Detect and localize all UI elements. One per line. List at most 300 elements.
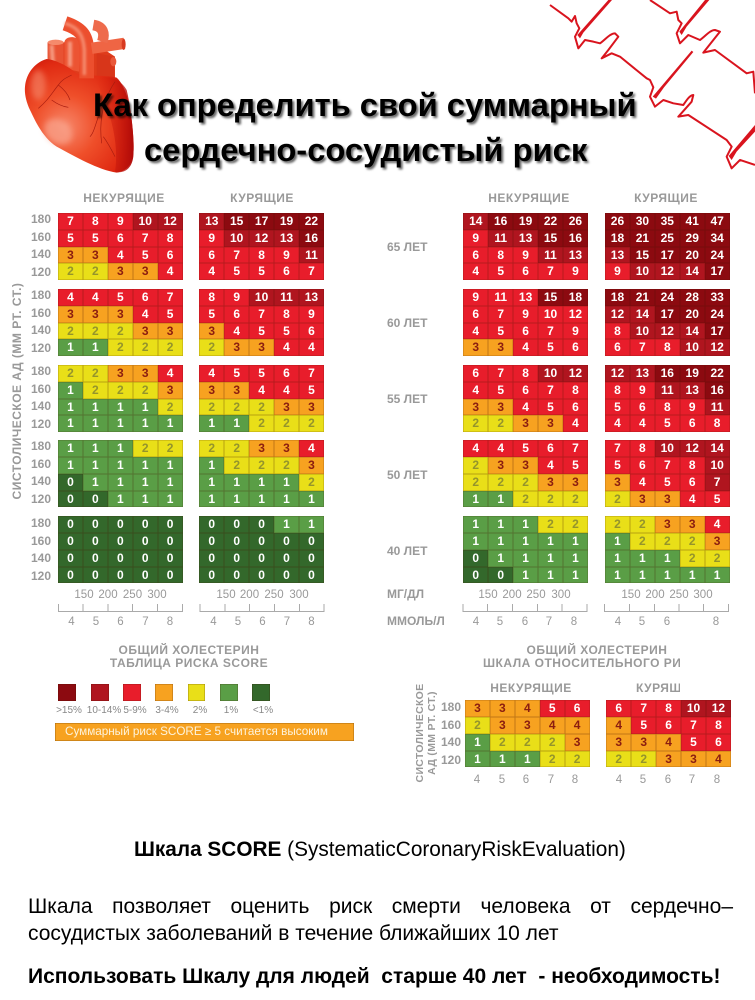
legend heading: [110, 643, 268, 670]
panel: left smokers 55: [199, 365, 324, 432]
panel: left smokers 60: 5: [258, 324, 265, 338]
cholesterol axes: 6: [522, 616, 528, 628]
panel: right smokers 40: 1: [664, 551, 671, 565]
row labels 55: 120: [31, 416, 51, 430]
panel: left smokers 40: 0: [233, 568, 240, 582]
panel: right smokers 55: 11: [661, 383, 674, 397]
panel: left smokers 65: 9: [208, 231, 215, 245]
swatch <1%: [252, 684, 270, 701]
panel: right smokers 65: 26: [611, 214, 624, 228]
panel: right smokers 65: 35: [661, 214, 674, 228]
age label 50: 50 ЛЕТ: [387, 468, 427, 482]
age label 60: 60 ЛЕТ: [387, 316, 427, 330]
panel: right non-smokers 55: 3: [522, 416, 529, 430]
panel: right non-smokers 65: 13: [569, 248, 582, 262]
panel: right non-smokers 50: 2: [472, 475, 479, 489]
panel: left smokers 50: 2: [283, 458, 290, 472]
panel: relative non-smokers: 3: [524, 718, 531, 732]
panel: left non-smokers 60: 3: [92, 307, 99, 321]
panel: right non-smokers 60: 11: [494, 290, 507, 304]
panel: right smokers 50: 3: [639, 492, 646, 506]
heading: smokers, right: КУРЯЩИЕ: [634, 191, 698, 205]
panel: left non-smokers 50: [58, 440, 183, 507]
row labels 50: 140: [31, 474, 51, 488]
relative risk heading line 1: ОБЩИЙ ХОЛЕСТЕРИН: [527, 643, 667, 657]
panel: right non-smokers 60: 7: [547, 324, 554, 338]
panel: left non-smokers 40: 0: [167, 568, 173, 582]
panel: relative smokers: 2: [615, 752, 622, 766]
panel: right non-smokers 50: 2: [522, 475, 529, 489]
row labels 55: [31, 364, 51, 430]
panel: right non-smokers 60: 12: [569, 307, 582, 321]
panel: left non-smokers 65: 4: [167, 264, 173, 278]
panel: right non-smokers 65: 6: [522, 264, 529, 278]
panel: left non-smokers 40: 0: [142, 551, 149, 565]
cholesterol axes: 250: [264, 589, 284, 601]
panel: left smokers 65: 10: [230, 231, 243, 245]
panel: left non-smokers 60: [58, 289, 183, 356]
panel: right non-smokers 60: 10: [544, 307, 557, 321]
panel: right smokers 55: 16: [661, 366, 674, 380]
panel: left smokers 60: 3: [208, 324, 215, 338]
panel: right smokers 40: 1: [614, 534, 621, 548]
panel: right non-smokers 60: 7: [497, 307, 504, 321]
cholesterol axes: 200: [645, 589, 665, 601]
panel: right non-smokers 60: 6: [572, 340, 579, 354]
panel: left smokers 40: 0: [258, 568, 265, 582]
panel: right non-smokers 40: [463, 516, 588, 583]
panel: right smokers 50: 7: [614, 441, 621, 455]
panel: right smokers 50: 6: [689, 475, 696, 489]
row labels relative: [441, 700, 461, 766]
panel: right non-smokers 55: 6: [572, 400, 579, 414]
panel: left smokers 40: 0: [283, 568, 290, 582]
panel: right non-smokers 55: 8: [572, 383, 579, 397]
panel: relative non-smokers: 1: [474, 752, 481, 766]
panel: right non-smokers 55: 6: [522, 383, 529, 397]
panel: left smokers 60: [199, 289, 324, 356]
cholesterol axes: 8: [167, 616, 173, 628]
panel: right non-smokers 65: 5: [497, 264, 504, 278]
panel: left non-smokers 65: 7: [142, 231, 149, 245]
panel: left non-smokers 55: 1: [67, 400, 74, 414]
panel: relative smokers: 3: [615, 735, 622, 749]
panel: right smokers 60: 21: [636, 290, 649, 304]
panel: left non-smokers 50: 1: [117, 475, 124, 489]
panel: right smokers 65: 14: [686, 264, 699, 278]
panel: left smokers 65: 5: [233, 264, 240, 278]
heading: non-smokers, right: НЕКУРЯЩИЕ: [488, 191, 570, 205]
cholesterol axes: 250: [123, 589, 142, 601]
panel: left non-smokers 40: 0: [117, 517, 124, 531]
panel: left smokers 50: 1: [308, 492, 315, 506]
panel: left smokers 40: 0: [308, 551, 315, 565]
panel: right smokers 40: 3: [664, 517, 671, 531]
panel: left smokers 50: 4: [308, 441, 315, 455]
panel: right smokers 65: 21: [636, 231, 649, 245]
panel: left non-smokers 60: 2: [67, 324, 74, 338]
panel: left smokers 40: 0: [308, 568, 315, 582]
panel: left non-smokers 55: 3: [117, 366, 124, 380]
panel: left smokers 50: 1: [233, 492, 240, 506]
panel: right non-smokers 60: 5: [547, 340, 554, 354]
panel: left smokers 50: 1: [208, 475, 215, 489]
panel: relative smokers: 8: [665, 701, 672, 715]
panel: left smokers 65: 6: [208, 248, 215, 262]
panel: left smokers 40: 0: [208, 534, 215, 548]
panel: left non-smokers 40: 0: [67, 534, 74, 548]
panel: right non-smokers 50: 4: [497, 441, 504, 455]
panel: left smokers 65: 13: [205, 214, 218, 228]
panel: left smokers 60: 5: [208, 307, 215, 321]
panel: relative smokers: 4: [715, 752, 722, 766]
panel: left smokers 60: 9: [308, 307, 315, 321]
panel: right smokers 65: 25: [661, 231, 674, 245]
legend label 5-9%: 5-9%: [123, 705, 147, 716]
panel: left non-smokers 65: 9: [117, 214, 124, 228]
panel: right smokers 50: 3: [614, 475, 621, 489]
panel: left non-smokers 60: 4: [92, 290, 99, 304]
panel: right non-smokers 55: 8: [522, 366, 529, 380]
panel: left non-smokers 55: 1: [117, 400, 124, 414]
panel: left non-smokers 60: 2: [167, 340, 173, 354]
panel: left non-smokers 40: 0: [67, 551, 74, 565]
panel: right smokers 55: 12: [611, 366, 624, 380]
panel: right non-smokers 50: 6: [547, 441, 554, 455]
panel: right smokers 55: [605, 365, 730, 432]
panel: right non-smokers 65: 6: [472, 248, 479, 262]
relative risk x axis digits: 7: [689, 774, 695, 786]
row labels 60: 180: [31, 288, 51, 302]
cholesterol axes: 200: [98, 589, 118, 601]
legend label 1%: 1%: [224, 705, 238, 716]
panel: right non-smokers 55: 3: [472, 400, 479, 414]
panel: right smokers 55: 16: [710, 383, 724, 397]
cholesterol axes: 300: [289, 589, 309, 601]
panel: right non-smokers 50: 3: [522, 458, 529, 472]
relative risk x axis digits: 4: [474, 774, 481, 786]
panel: right smokers 40: 1: [664, 568, 671, 582]
panel: right non-smokers 55: 4: [472, 383, 479, 397]
panel: relative smokers: 7: [690, 718, 697, 732]
panel: left non-smokers 60: 2: [117, 324, 124, 338]
row labels 65: [31, 212, 51, 278]
panel: left smokers 50: 1: [208, 458, 215, 472]
panel: right non-smokers 40: 2: [572, 517, 579, 531]
panel: left non-smokers 60: 2: [92, 324, 99, 338]
panel: left smokers 60: 9: [233, 290, 240, 304]
panel: left non-smokers 50: 1: [67, 441, 74, 455]
panel: left non-smokers 55: 1: [117, 416, 124, 430]
panel: left non-smokers 60: 2: [117, 340, 124, 354]
panel: right non-smokers 40: 1: [572, 568, 579, 582]
cholesterol axes: 6: [117, 616, 124, 628]
panel: right smokers 60: [605, 289, 730, 356]
panel: left smokers 40: 0: [233, 517, 240, 531]
panel: left smokers 50: 2: [233, 441, 240, 455]
panel: right smokers 65: 34: [710, 231, 724, 245]
panel: right non-smokers 65: 26: [569, 214, 582, 228]
panel: relative smokers: 3: [665, 752, 672, 766]
panel: right smokers 50: 6: [639, 458, 646, 472]
panel: left smokers 55: 3: [308, 400, 315, 414]
panel: right smokers 65: 20: [686, 248, 699, 262]
panel: right non-smokers 40: 1: [572, 534, 579, 548]
panel: right smokers 55: 4: [639, 416, 646, 430]
panel: right smokers 60: 8: [664, 340, 671, 354]
panel: left smokers 40: 0: [258, 551, 265, 565]
panel: relative non-smokers: [465, 700, 590, 767]
legend label <1%: <1%: [253, 705, 273, 716]
panel: right smokers 65: 47: [710, 214, 724, 228]
panel: left smokers 40: 0: [258, 517, 265, 531]
panel: right smokers 60: 24: [710, 307, 724, 321]
row labels 40: 160: [31, 534, 51, 548]
cholesterol axes: 200: [240, 589, 259, 601]
row labels 50: 120: [31, 492, 51, 506]
panel: relative non-smokers: 1: [499, 752, 506, 766]
cholesterol axes: 4: [68, 616, 75, 628]
panel: right smokers 40: 3: [714, 534, 720, 548]
panel: left smokers 65: 6: [283, 264, 290, 278]
panel: right non-smokers 50: 2: [522, 492, 529, 506]
panel: relative smokers: 6: [665, 718, 672, 732]
cholesterol axes: 7: [284, 616, 290, 628]
panel: left non-smokers 65: 3: [117, 264, 124, 278]
panel: left smokers 50: 1: [283, 492, 290, 506]
panel: right non-smokers 55: 7: [497, 366, 504, 380]
panel: right smokers 65: [605, 213, 730, 280]
panel: right smokers 55: 9: [689, 400, 696, 414]
panel: left non-smokers 50: 1: [167, 492, 173, 506]
heading: non-smokers, left: НЕКУРЯЩИЕ: [83, 191, 165, 205]
panel: left non-smokers 55: 2: [67, 366, 74, 380]
panel: left non-smokers 40: 0: [117, 551, 124, 565]
panel: left smokers 55: 3: [208, 383, 215, 397]
panel: left smokers 50: 2: [208, 441, 215, 455]
row labels 40: 120: [31, 568, 51, 582]
panel: right smokers 50: 4: [689, 492, 696, 506]
panel: left smokers 60: 4: [308, 340, 315, 354]
panel: right non-smokers 60: 5: [497, 324, 504, 338]
age label 40: 40 ЛЕТ: [387, 544, 427, 558]
panel: left non-smokers 55: 2: [117, 383, 124, 397]
panel: right non-smokers 60: 18: [569, 290, 582, 304]
panel: right smokers 55: 9: [639, 383, 646, 397]
panel: right non-smokers 40: 2: [547, 517, 554, 531]
legend label 2%: 2%: [193, 705, 207, 716]
cholesterol axes: 150: [216, 589, 236, 601]
panel: left non-smokers 50: 2: [142, 441, 149, 455]
panel: left non-smokers 65: 6: [167, 248, 173, 262]
relative risk x axis digits: 4: [616, 774, 623, 786]
panel: right smokers 60: 7: [639, 340, 646, 354]
panel: left smokers 65: 13: [280, 231, 293, 245]
row labels 55: 160: [31, 382, 51, 396]
panel: right smokers 55: 13: [636, 366, 649, 380]
panel: right non-smokers 50: 2: [572, 492, 579, 506]
row labels 65: 120: [31, 264, 51, 278]
panel: right smokers 60: 8: [614, 324, 621, 338]
panel: right non-smokers 40: 1: [522, 517, 529, 531]
panel: right non-smokers 65: [463, 213, 588, 280]
row labels 55: 180: [31, 364, 51, 378]
panel: relative non-smokers: 2: [549, 735, 556, 749]
text: description: Шкала позволяет оценить риск смерти человека от сердечно–: [28, 895, 733, 918]
panel: relative non-smokers: 2: [524, 735, 531, 749]
panel: left non-smokers 55: 1: [142, 400, 149, 414]
cholesterol axes: 4: [473, 616, 480, 628]
panel: left smokers 55: 2: [258, 416, 265, 430]
panel: left non-smokers 40: 0: [92, 517, 99, 531]
cholesterol axes: 250: [526, 589, 546, 601]
panel: right smokers 60: 14: [636, 307, 649, 321]
panel: left non-smokers 50: 1: [167, 458, 173, 472]
panel: relative non-smokers: 2: [499, 735, 506, 749]
panel: left smokers 50: 1: [258, 475, 265, 489]
swatch >15%: [58, 684, 76, 701]
panel: right smokers 40: 2: [639, 517, 646, 531]
panel: left smokers 40: 0: [233, 534, 240, 548]
panel: right smokers 60: 14: [686, 324, 699, 338]
panel: left non-smokers 50: 0: [92, 492, 99, 506]
panel: right smokers 55: 8: [714, 416, 720, 430]
panel: right smokers 50: 5: [664, 475, 671, 489]
cholesterol axes: 300: [693, 589, 713, 601]
text: description: [28, 895, 734, 945]
panel: right non-smokers 60: 3: [472, 340, 479, 354]
panel: right non-smokers 60: 9: [522, 307, 529, 321]
panel: right non-smokers 50: 7: [572, 441, 579, 455]
swatch 10-14%: [91, 684, 108, 701]
panel: left smokers 55: 2: [258, 400, 265, 414]
age label 55: 55 ЛЕТ: [387, 392, 427, 406]
panel: left smokers 40: [199, 516, 324, 583]
panel: right non-smokers 55: 10: [544, 366, 557, 380]
panel: right smokers 40: 1: [614, 568, 621, 582]
panel: left non-smokers 65: 8: [167, 231, 173, 245]
relative risk x axis digits: 5: [640, 774, 646, 786]
panel: left smokers 55: 1: [208, 416, 215, 430]
panel: left non-smokers 65: 5: [92, 231, 99, 245]
panel: left non-smokers 50: 1: [67, 458, 74, 472]
cholesterol axes: 200: [502, 589, 522, 601]
panel: left smokers 55: 3: [233, 383, 240, 397]
panel: relative non-smokers: 1: [524, 752, 531, 766]
panel: left non-smokers 40: 0: [117, 568, 124, 582]
panel: right non-smokers 55: 6: [472, 366, 479, 380]
panel: left non-smokers 65: [58, 213, 183, 280]
panel: right non-smokers 60: 13: [519, 290, 532, 304]
cholesterol axes: 6: [664, 616, 670, 628]
panel: left smokers 65: 19: [280, 214, 293, 228]
panel: left non-smokers 40: 0: [92, 534, 99, 548]
panel: right smokers 65: 30: [636, 214, 649, 228]
panel: right non-smokers 50: 5: [572, 458, 579, 472]
panel: left non-smokers 40: 0: [167, 551, 173, 565]
panel: relative smokers: 8: [715, 718, 722, 732]
panel: right smokers 40: 2: [639, 534, 646, 548]
panel: left smokers 40: 0: [208, 568, 215, 582]
panel: right non-smokers 55: 2: [472, 416, 479, 430]
panel: left non-smokers 40: 0: [92, 568, 99, 582]
panel: relative smokers: 5: [690, 735, 697, 749]
relative risk x axis digits: [474, 774, 720, 786]
panel: right non-smokers 55: [463, 365, 588, 432]
panel: right non-smokers 60: 4: [522, 340, 529, 354]
panel: left non-smokers 60: 6: [142, 290, 149, 304]
cholesterol axes: 8: [571, 616, 577, 628]
panel: right smokers 40: 2: [614, 517, 621, 531]
panel: left non-smokers 60: 5: [117, 290, 124, 304]
panel: right non-smokers 65: 9: [522, 248, 529, 262]
panel: right smokers 55: 5: [614, 400, 621, 414]
panel: left smokers 50: 1: [283, 475, 290, 489]
panel: right smokers 40: 2: [689, 551, 696, 565]
panel: relative smokers: 6: [715, 735, 722, 749]
panel: left smokers 65: 8: [258, 248, 265, 262]
panel: left smokers 60: 8: [283, 307, 290, 321]
panel: left smokers 55: 5: [233, 366, 240, 380]
cholesterol axes: 4: [210, 616, 217, 628]
panel: left non-smokers 55: [58, 365, 183, 432]
panel: left smokers 55: 3: [283, 400, 290, 414]
panel: right non-smokers 65: 16: [494, 214, 507, 228]
panel: right non-smokers 65: 11: [494, 231, 507, 245]
panel: left smokers 60: 4: [233, 324, 240, 338]
panel: right smokers 55: 6: [689, 416, 696, 430]
text: description: сосудистых заболеваний в течение ближайших 10 лет: [28, 922, 559, 945]
panel: left non-smokers 40: 0: [92, 551, 99, 565]
panel: left smokers 50: 2: [233, 458, 240, 472]
panel: right non-smokers 60: 4: [472, 324, 479, 338]
panel: left non-smokers 65: 12: [163, 214, 177, 228]
row labels 65: 140: [31, 247, 51, 261]
panel: right smokers 55: 5: [664, 416, 671, 430]
panel: left non-smokers 60: 3: [117, 307, 124, 321]
cholesterol axes: 5: [497, 616, 503, 628]
panel: right non-smokers 60: 6: [522, 324, 529, 338]
panel: right non-smokers 65: 19: [519, 214, 532, 228]
panel: right smokers 40: 1: [639, 568, 646, 582]
panel: right non-smokers 50: 1: [472, 492, 479, 506]
row labels 50: [31, 439, 51, 506]
legend label 10-14%: 10-14%: [87, 705, 121, 716]
cholesterol axes: 5: [235, 616, 241, 628]
title line 1: Как определить свой суммарный: [93, 86, 637, 123]
cholesterol axes: [58, 589, 729, 628]
panel: left non-smokers 60: 2: [142, 340, 149, 354]
panel: left smokers 40: 0: [233, 551, 240, 565]
panel: left non-smokers 55: 1: [167, 416, 173, 430]
panel: left smokers 60: 6: [233, 307, 240, 321]
callout: high risk bar: [55, 723, 354, 741]
panel: relative non-smokers: 4: [549, 718, 556, 732]
panel: relative non-smokers: 5: [549, 701, 556, 715]
cholesterol axes: 150: [621, 589, 641, 601]
panel: left non-smokers 60: 3: [67, 307, 74, 321]
panel: right non-smokers 40: 1: [547, 551, 554, 565]
panel: left non-smokers 50: 1: [92, 475, 99, 489]
panel: left smokers 65: 9: [283, 248, 290, 262]
panel: right non-smokers 55: 4: [522, 400, 529, 414]
panel: left smokers 55: 4: [258, 383, 265, 397]
panel: left smokers 55: 5: [308, 383, 315, 397]
panel: right non-smokers 55: 12: [569, 366, 582, 380]
panel: left smokers 60: 3: [233, 340, 240, 354]
panel: relative smokers: 5: [640, 718, 647, 732]
panel: left non-smokers 50: 0: [67, 492, 74, 506]
